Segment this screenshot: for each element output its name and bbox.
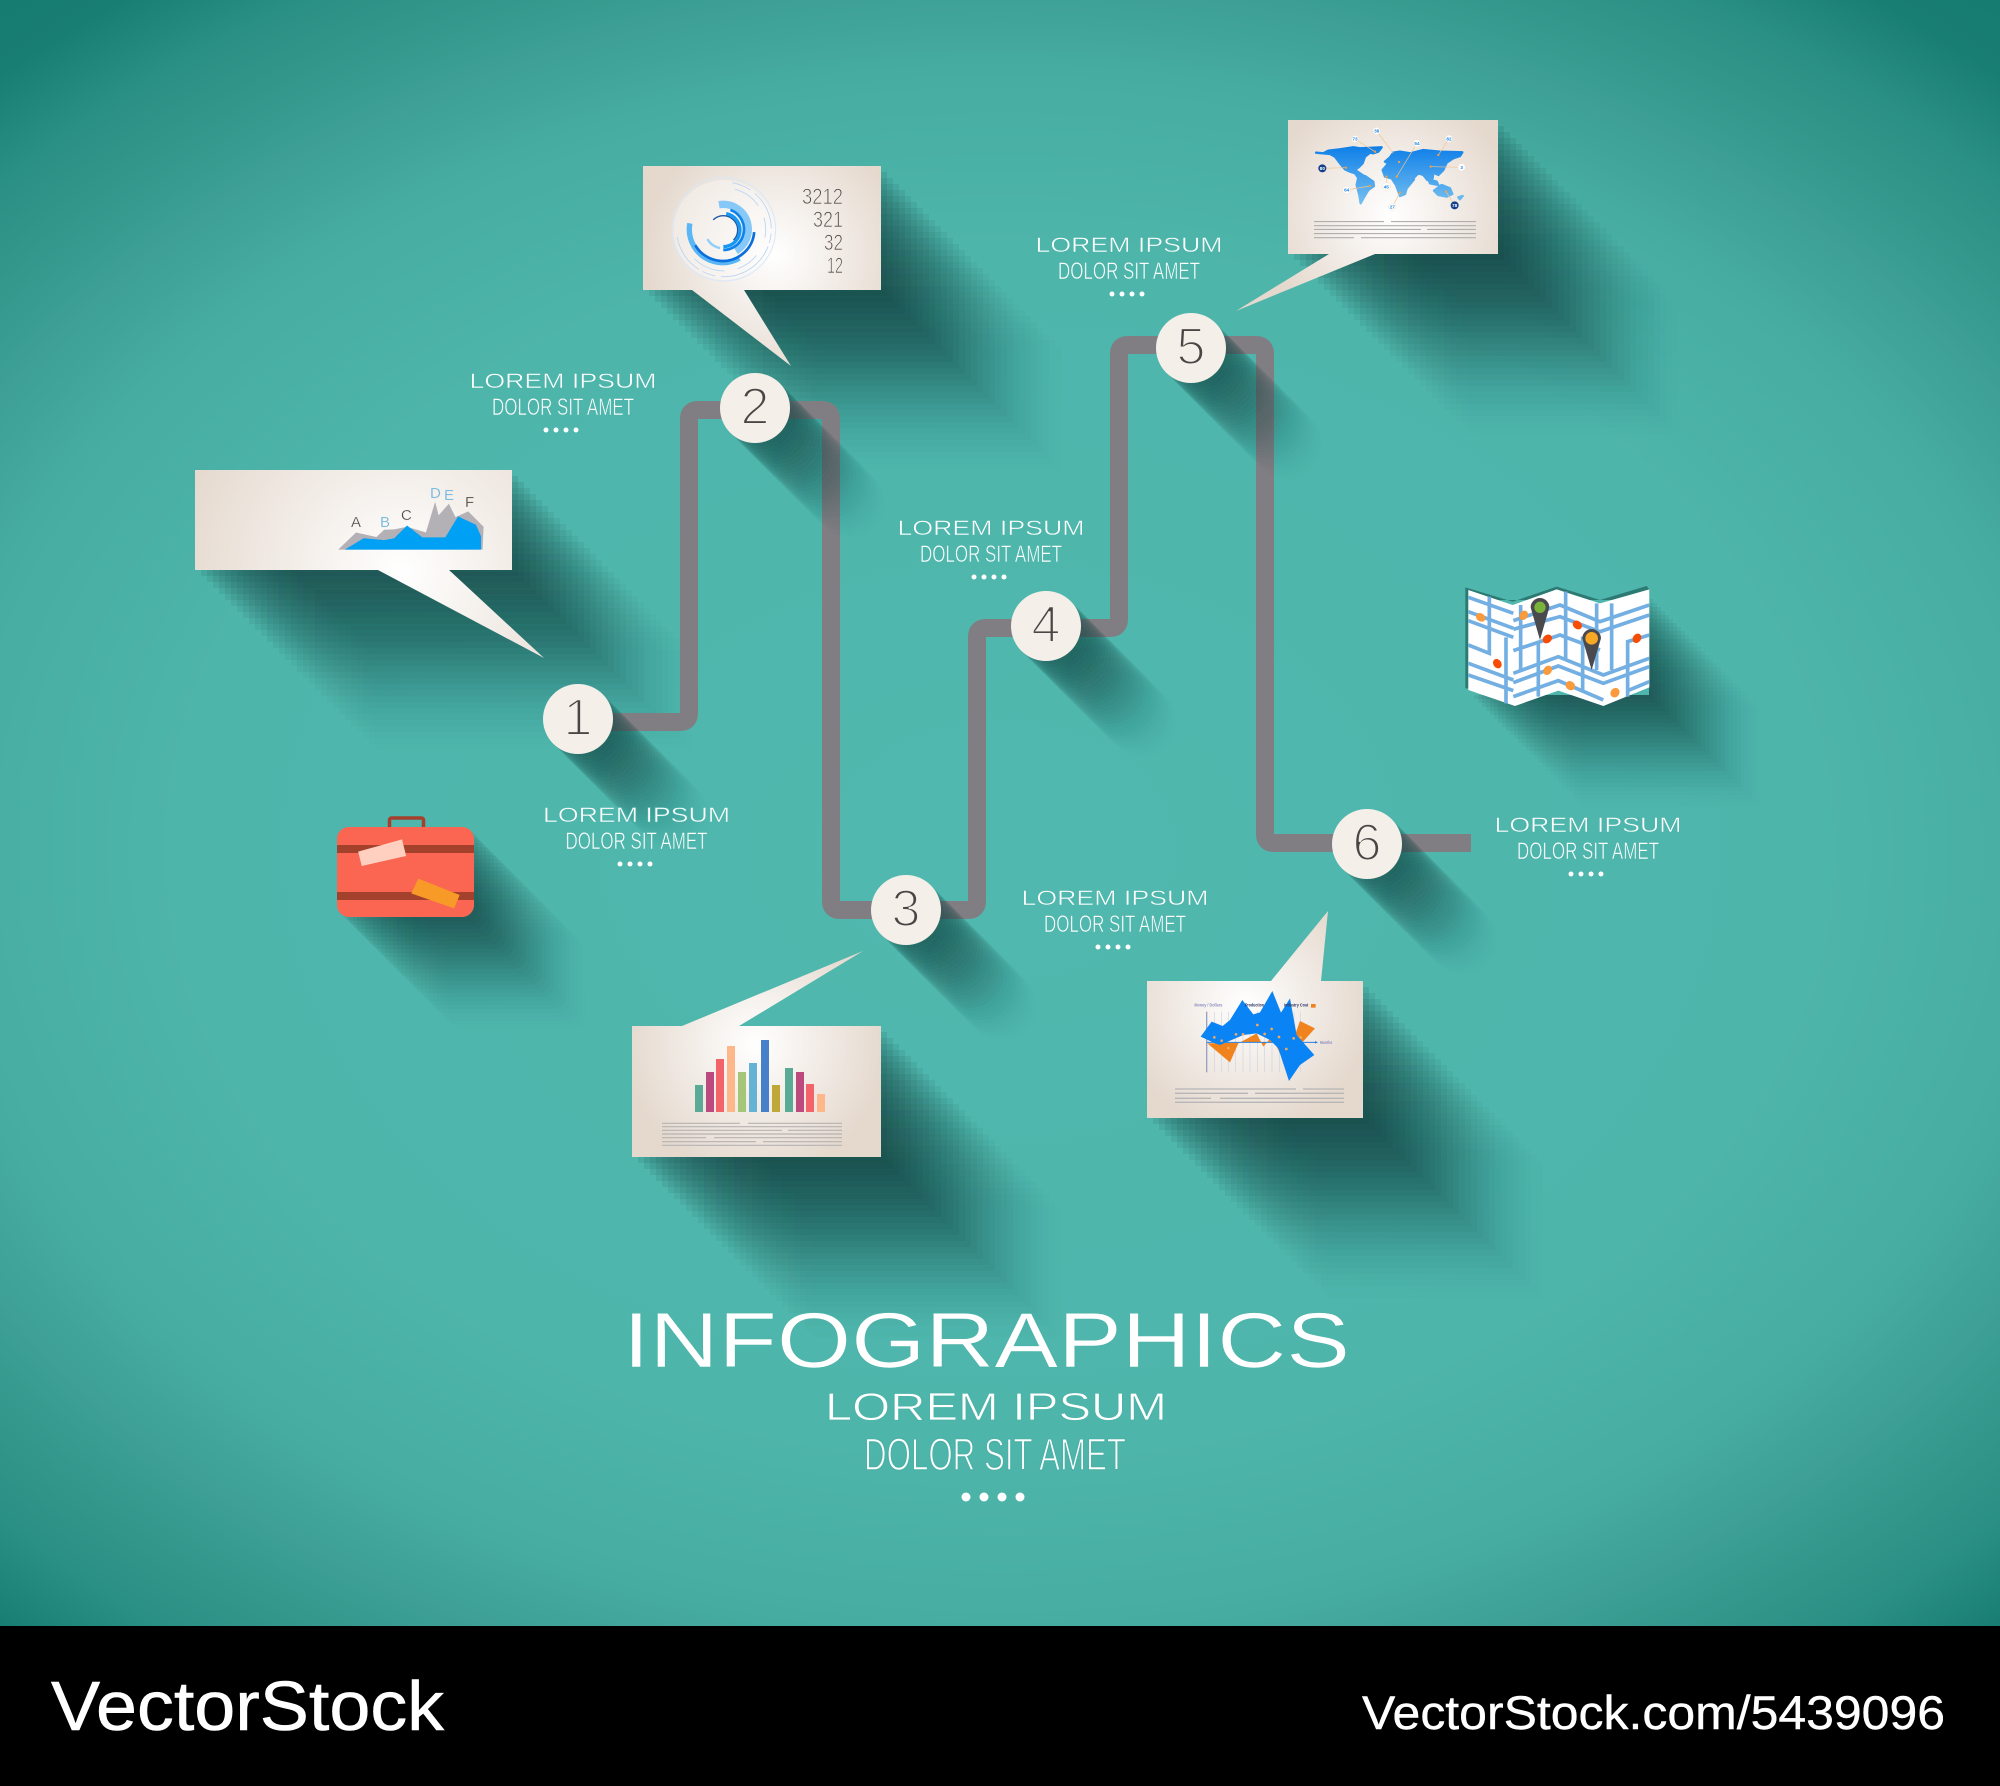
panel: card 3 bar chart <box>632 951 881 1157</box>
area chart: C <box>401 507 412 524</box>
step circle 5: 5 <box>1177 318 1205 376</box>
title: INFOGRAPHICS <box>623 1296 1350 1384</box>
long shadow: card 2 <box>643 166 881 290</box>
icon: folded map <box>1465 586 1649 706</box>
step circle 2 <box>720 373 790 443</box>
label: step 5 <box>1036 234 1222 296</box>
step circle 6 <box>1332 809 1402 879</box>
label: step 2: DOLOR SIT AMET <box>492 394 634 421</box>
numbers: 3212 <box>802 184 843 209</box>
title dots <box>962 1492 1024 1502</box>
label: step 6: DOLOR SIT AMET <box>1517 838 1659 865</box>
subtitle: dolor sit amet: DOLOR SIT AMET <box>864 1429 1126 1480</box>
step circle 3 <box>871 875 941 945</box>
world map: 3 <box>1460 165 1463 170</box>
area chart: D <box>430 485 441 502</box>
bar chart <box>695 1040 825 1112</box>
label: step 2: LOREM IPSUM <box>470 370 656 393</box>
panel: card 6 area comparison chart <box>1147 911 1363 1118</box>
world map: 73 <box>1352 137 1358 142</box>
label: step 6 <box>1494 814 1682 876</box>
comparison chart <box>1194 991 1332 1081</box>
numbers: 321 <box>813 207 843 232</box>
label: step 1: DOLOR SIT AMET <box>566 828 708 855</box>
area chart <box>338 485 484 550</box>
long shadow: card 5 <box>1288 120 1498 254</box>
step circle 4: 4 <box>1032 596 1060 654</box>
world map: 78 <box>1452 203 1458 208</box>
step circle 6: 6 <box>1353 814 1381 872</box>
subtitle: lorem ipsum: LOREM IPSUM <box>825 1386 1167 1429</box>
comparison chart: Production <box>1245 1003 1264 1009</box>
text lines <box>1175 1089 1344 1102</box>
map pin: orange <box>1582 629 1601 670</box>
footer image id: VectorStock.com/5439096 <box>1362 1686 1945 1739</box>
step circle 1: 1 <box>564 689 592 747</box>
long shadow: card 3 <box>632 1026 881 1157</box>
area chart: A <box>351 514 361 531</box>
long shadow: card 6 <box>1147 981 1363 1118</box>
text lines <box>662 1123 842 1145</box>
footer brand: VectorStock <box>51 1667 445 1745</box>
map pin: green <box>1531 598 1549 640</box>
text lines <box>1314 222 1476 238</box>
long shadow: map <box>1470 595 1649 695</box>
label: step 6: LOREM IPSUM <box>1494 814 1682 837</box>
world map: 38 <box>1374 129 1380 134</box>
icon: suitcase <box>337 818 474 917</box>
label: step 3: DOLOR SIT AMET <box>1044 911 1186 938</box>
step circle 5 <box>1156 313 1226 383</box>
world map: 82 <box>1446 136 1452 141</box>
world map: 64 <box>1344 188 1350 193</box>
world map: 54 <box>1414 141 1420 146</box>
numbers <box>802 184 843 278</box>
comparison chart: Industry Cost <box>1284 1003 1309 1009</box>
numbers: 12 <box>827 253 843 278</box>
world map: 27 <box>1390 204 1395 209</box>
area chart: B <box>380 514 390 531</box>
footer bar <box>0 1626 2000 1786</box>
panel: card 5 world map <box>1236 120 1498 311</box>
area chart: E <box>444 487 454 504</box>
label: step 5: DOLOR SIT AMET <box>1058 258 1200 285</box>
label: step 2 <box>470 370 656 432</box>
world map: 45 <box>1384 184 1389 189</box>
step circle 1 <box>543 684 613 754</box>
panel: card 2 radial gauge <box>643 166 881 366</box>
long shadow: card 1 <box>195 470 512 570</box>
numbers: 32 <box>824 230 843 255</box>
panel: card 1 area chart <box>195 470 544 658</box>
comparison chart: Money / Dollars <box>1194 1003 1222 1009</box>
label: step 4: DOLOR SIT AMET <box>920 541 1062 568</box>
label: step 5: LOREM IPSUM <box>1036 234 1222 257</box>
comparison chart: Months <box>1320 1040 1332 1046</box>
label: step 4 <box>898 517 1084 580</box>
step circle 2: 2 <box>741 378 769 436</box>
area chart: F <box>465 494 474 511</box>
label: step 1 <box>543 804 730 866</box>
radial gauge <box>669 174 779 284</box>
label: step 4: LOREM IPSUM <box>898 517 1084 540</box>
label: step 3 <box>1022 887 1208 950</box>
step circle 3: 3 <box>892 880 920 938</box>
world map: 80 <box>1320 166 1325 171</box>
long shadow: suitcase <box>337 827 474 917</box>
step circle 4 <box>1011 591 1081 661</box>
world map <box>1316 127 1465 210</box>
label: step 3: LOREM IPSUM <box>1022 887 1208 910</box>
label: step 1: LOREM IPSUM <box>543 804 730 827</box>
